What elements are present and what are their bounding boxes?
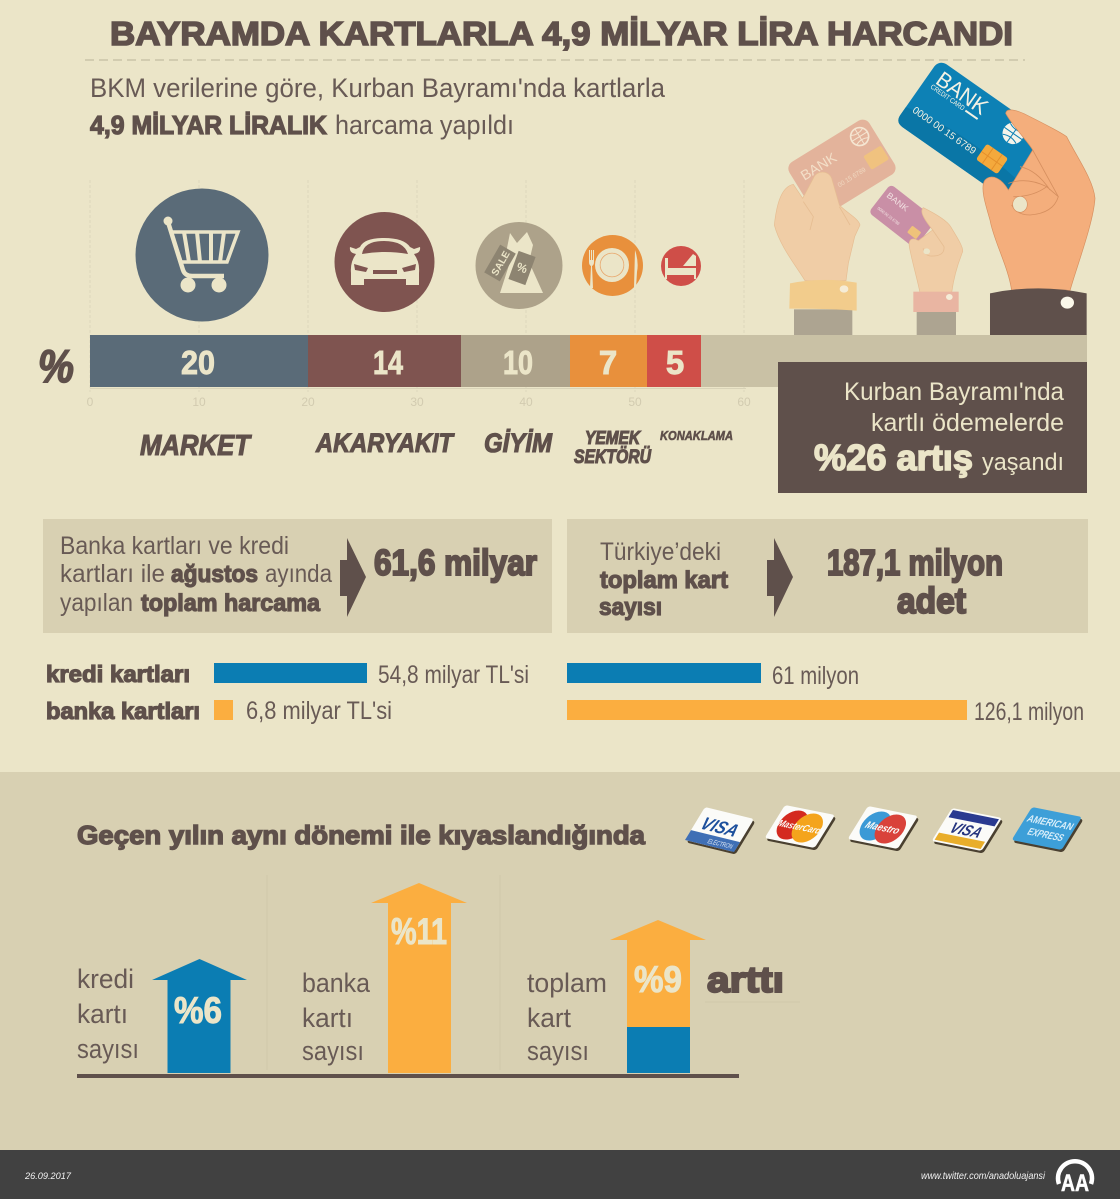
- title: BAYRAMDA KARTLARLA 4,9 MİLYAR LİRA HARCANDI: [110, 15, 1013, 52]
- panel: total spending: 61,6 milyar: [374, 542, 537, 583]
- arrow: total cards up 9 percent: %9: [634, 959, 682, 1000]
- stacked bar chart: 5: [666, 344, 684, 381]
- panel: year on year comparison: [0, 772, 1120, 1150]
- purple card: 0000 00 15 6789: [876, 206, 901, 226]
- panel: total spending: toplam harcama: [141, 590, 321, 617]
- bars: spending by card type: 54,8 milyar TL'si: [378, 661, 529, 689]
- percent sign: %: [38, 340, 74, 392]
- icon: car: [334, 212, 434, 312]
- panel: total card count: sayısı: [599, 594, 662, 621]
- card logo: MasterCard: [765, 805, 836, 850]
- card logo: American Express: [1012, 807, 1084, 852]
- arrow: total cards up 9 percent: [610, 920, 706, 1073]
- label: bank card count: kartı: [302, 1003, 353, 1033]
- axis scale: 30: [410, 395, 424, 409]
- icon: shopping cart: [136, 188, 268, 322]
- blue card: 0000 00 15 6789: [910, 105, 978, 157]
- label: increased: arttı: [707, 959, 784, 1000]
- intro text: [90, 73, 666, 140]
- intro text: harcama yapıldı: [335, 110, 514, 140]
- label: total card count: toplam: [527, 968, 607, 998]
- logo: Anadolu Agency: [1058, 1161, 1092, 1197]
- label: total card count: [527, 968, 607, 1066]
- footer: [0, 1150, 1120, 1199]
- footer: 26.09.2017: [24, 1171, 72, 1181]
- label: total card count: sayısı: [527, 1036, 589, 1066]
- stacked bar chart: 14: [373, 344, 404, 381]
- purple card: BANK: [885, 190, 911, 214]
- callout: 26 percent increase: %26 artış: [814, 437, 973, 478]
- category labels: [140, 428, 733, 468]
- bars: spending by card type: [46, 661, 529, 725]
- card logo: Maestro: Maestro: [863, 820, 902, 837]
- callout: 26 percent increase: [778, 362, 1087, 493]
- panel: total spending: kartları ile: [60, 560, 165, 588]
- axis scale: [87, 388, 751, 409]
- logo: Anadolu Agency: AA: [1061, 1170, 1089, 1197]
- left hand card: 00 15 6789: [837, 166, 868, 189]
- stacked bar chart: 20: [181, 344, 215, 381]
- illustration: hands holding bank cards: [774, 59, 1095, 336]
- axis scale: 60: [737, 395, 751, 409]
- card logo: American Express: EXPRESS: [1025, 827, 1066, 844]
- panel: total card count: adet: [897, 580, 966, 621]
- icon: bed: [661, 246, 701, 286]
- arrow: [340, 538, 366, 617]
- card logo: Visa Electron: ELECTRON: [706, 838, 735, 851]
- axis scale: 0: [87, 395, 94, 409]
- arrow: bank cards up 11 percent: [371, 883, 467, 1073]
- label: total card count: kart: [527, 1003, 571, 1033]
- bars: card count by type: [567, 662, 1084, 726]
- purple card: [869, 184, 937, 248]
- category labels: KONAKLAMA: [660, 428, 733, 443]
- label: credit card count: kredi: [77, 964, 134, 994]
- label: bank card count: [302, 968, 371, 1066]
- left hand: [774, 172, 860, 281]
- arrow: [767, 538, 793, 617]
- label: credit card count: sayısı: [77, 1034, 139, 1064]
- label: bank card count: banka: [302, 968, 371, 998]
- card logo: Visa Electron: VISA: [697, 813, 743, 841]
- bars: card count by type: 61 milyon: [772, 662, 859, 690]
- arrow: bank cards up 11 percent: %11: [391, 911, 447, 952]
- icon: dress with sale tags: %: [515, 260, 530, 277]
- stacked bar chart: 10: [503, 344, 533, 381]
- intro text: BKM verilerine göre, Kurban Bayramı'nda kartlarla: [90, 73, 666, 103]
- axis scale: 20: [301, 395, 315, 409]
- arrow: credit cards up 6 percent: [152, 959, 247, 1073]
- panel: total spending: ayında: [265, 560, 332, 588]
- icon: dress with sale tags: SALE: [490, 249, 513, 278]
- blue card: BANK: [931, 66, 993, 120]
- callout: 26 percent increase: yaşandı: [982, 449, 1064, 476]
- axis scale: 50: [628, 395, 642, 409]
- big hand: [983, 110, 1095, 291]
- bars: spending by card type: kredi kartları: [46, 661, 190, 687]
- icon: plate with fork and knife: [582, 235, 643, 296]
- category labels: AKARYAKIT: [315, 428, 455, 458]
- panel: total card count: Türkiye’deki: [600, 538, 721, 566]
- bars: spending by card type: banka kartları: [46, 698, 200, 724]
- panel: total spending: Banka kartları ve kredi: [60, 532, 289, 560]
- axis scale: 10: [192, 395, 206, 409]
- label: credit card count: kartı: [77, 999, 128, 1029]
- panel: total card count: 187,1 milyon: [827, 542, 1003, 583]
- left cuff and sleeve: [794, 309, 852, 336]
- card logo: Maestro: [848, 806, 920, 852]
- panel: total spending: ağustos: [171, 561, 258, 588]
- card logo: Visa Electron: [685, 807, 756, 854]
- category labels: GİYİM: [484, 428, 552, 458]
- panel: total spending: yapılan: [60, 589, 133, 617]
- blue card: [895, 59, 1054, 202]
- middle cuff and sleeve: [917, 312, 956, 336]
- left hand card: BANK: [798, 149, 840, 183]
- card logo: MasterCard: MasterCard: [776, 818, 824, 836]
- big sleeve: [990, 288, 1087, 336]
- axis scale: 40: [519, 395, 533, 409]
- panel: total spending: [43, 519, 552, 633]
- heading: Geçen yılın aynı dönemi ile kıyaslandığında: [77, 820, 646, 850]
- callout: 26 percent increase: Kurban Bayramı'nda: [844, 378, 1064, 406]
- panel: total card count: toplam kart: [600, 567, 728, 594]
- blue card: CREDIT CARD: [929, 84, 966, 112]
- panel: total card count: [567, 519, 1088, 633]
- stacked bar chart: 7: [599, 344, 617, 381]
- label: bank card count: sayısı: [302, 1036, 364, 1066]
- intro text: 4,9 MİLYAR LİRALIK: [90, 110, 327, 140]
- bars: spending by card type: 6,8 milyar TL'si: [246, 697, 392, 725]
- callout: 26 percent increase: kartlı ödemelerde: [871, 409, 1064, 437]
- category labels: MARKET: [140, 430, 252, 462]
- middle hand: [909, 208, 963, 293]
- category labels: SEKTÖRÜ: [574, 447, 652, 468]
- left hand card: [785, 117, 899, 220]
- footer: www.twitter.com/anadoluajansi: [921, 1171, 1046, 1182]
- icon: dress with sale tags: [476, 222, 562, 309]
- card logo: Visa: [932, 808, 1004, 854]
- bars: card count by type: 126,1 milyon: [974, 698, 1084, 726]
- category labels: YEMEK: [585, 428, 642, 448]
- label: credit card count: [77, 964, 139, 1064]
- arrow: credit cards up 6 percent: %6: [174, 990, 222, 1031]
- card logo: Visa: VISA: [946, 820, 986, 842]
- stacked bar chart: [90, 335, 1087, 387]
- card logo: American Express: AMERICAN: [1024, 814, 1076, 833]
